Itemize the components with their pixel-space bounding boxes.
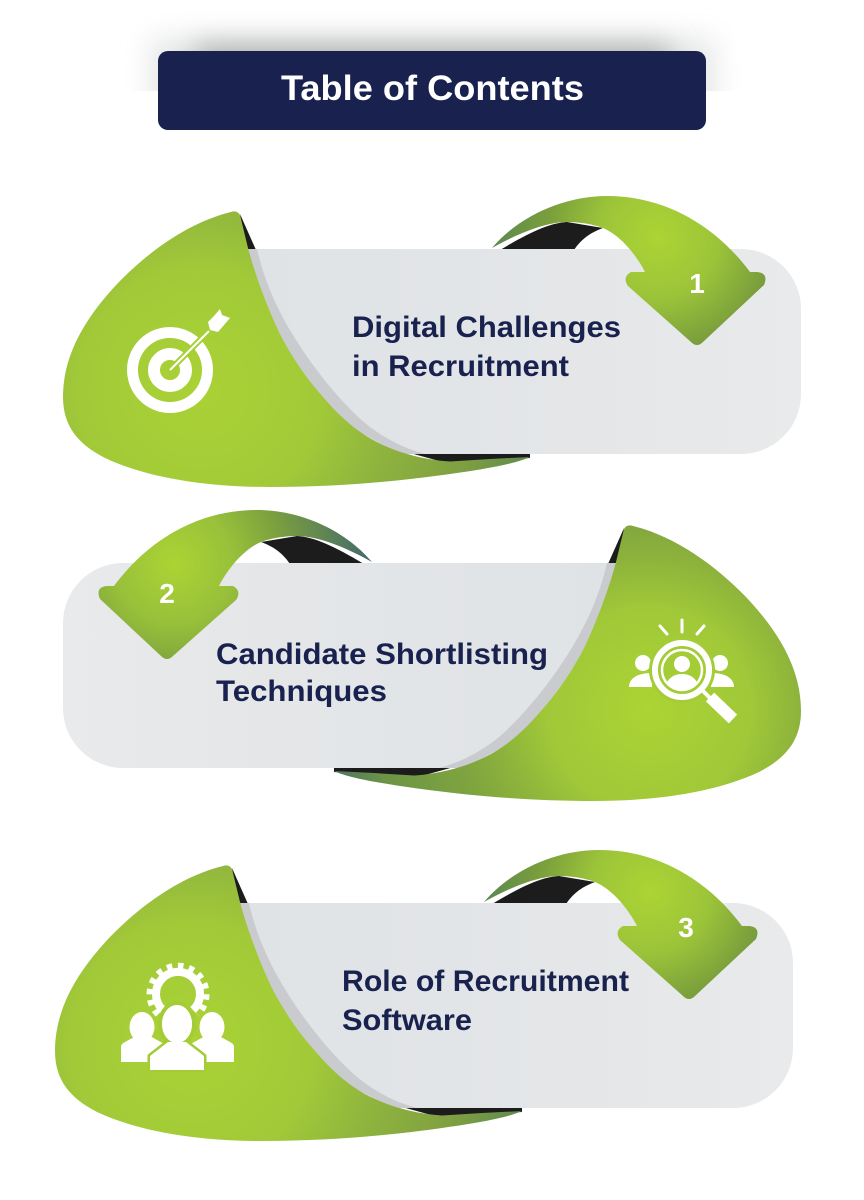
heading 2: Techniques bbox=[216, 675, 387, 708]
number 2: 2 bbox=[159, 578, 175, 609]
number 3: 3 bbox=[678, 912, 694, 943]
panel: item 3 bbox=[55, 850, 793, 1141]
number 1: 1 bbox=[689, 268, 705, 299]
panel: item 2 bbox=[63, 510, 801, 801]
curved arrow 1 bbox=[492, 196, 765, 345]
heading 2: Candidate Shortlisting bbox=[216, 638, 548, 671]
title text: Table of Contents bbox=[281, 69, 584, 108]
heading 3: Software bbox=[342, 1004, 472, 1037]
heading 3: Role of Recruitment bbox=[342, 965, 629, 998]
icon: candidate search magnifier bbox=[629, 620, 734, 719]
title banner bbox=[150, 38, 715, 130]
icon: team with gear bbox=[121, 966, 234, 1070]
heading 1: in Recruitment bbox=[352, 350, 569, 383]
icon: target with arrow bbox=[132, 309, 230, 408]
heading 1: Digital Challenges bbox=[352, 311, 621, 344]
panel: item 1 bbox=[63, 196, 801, 487]
green blob bbox=[63, 211, 530, 487]
